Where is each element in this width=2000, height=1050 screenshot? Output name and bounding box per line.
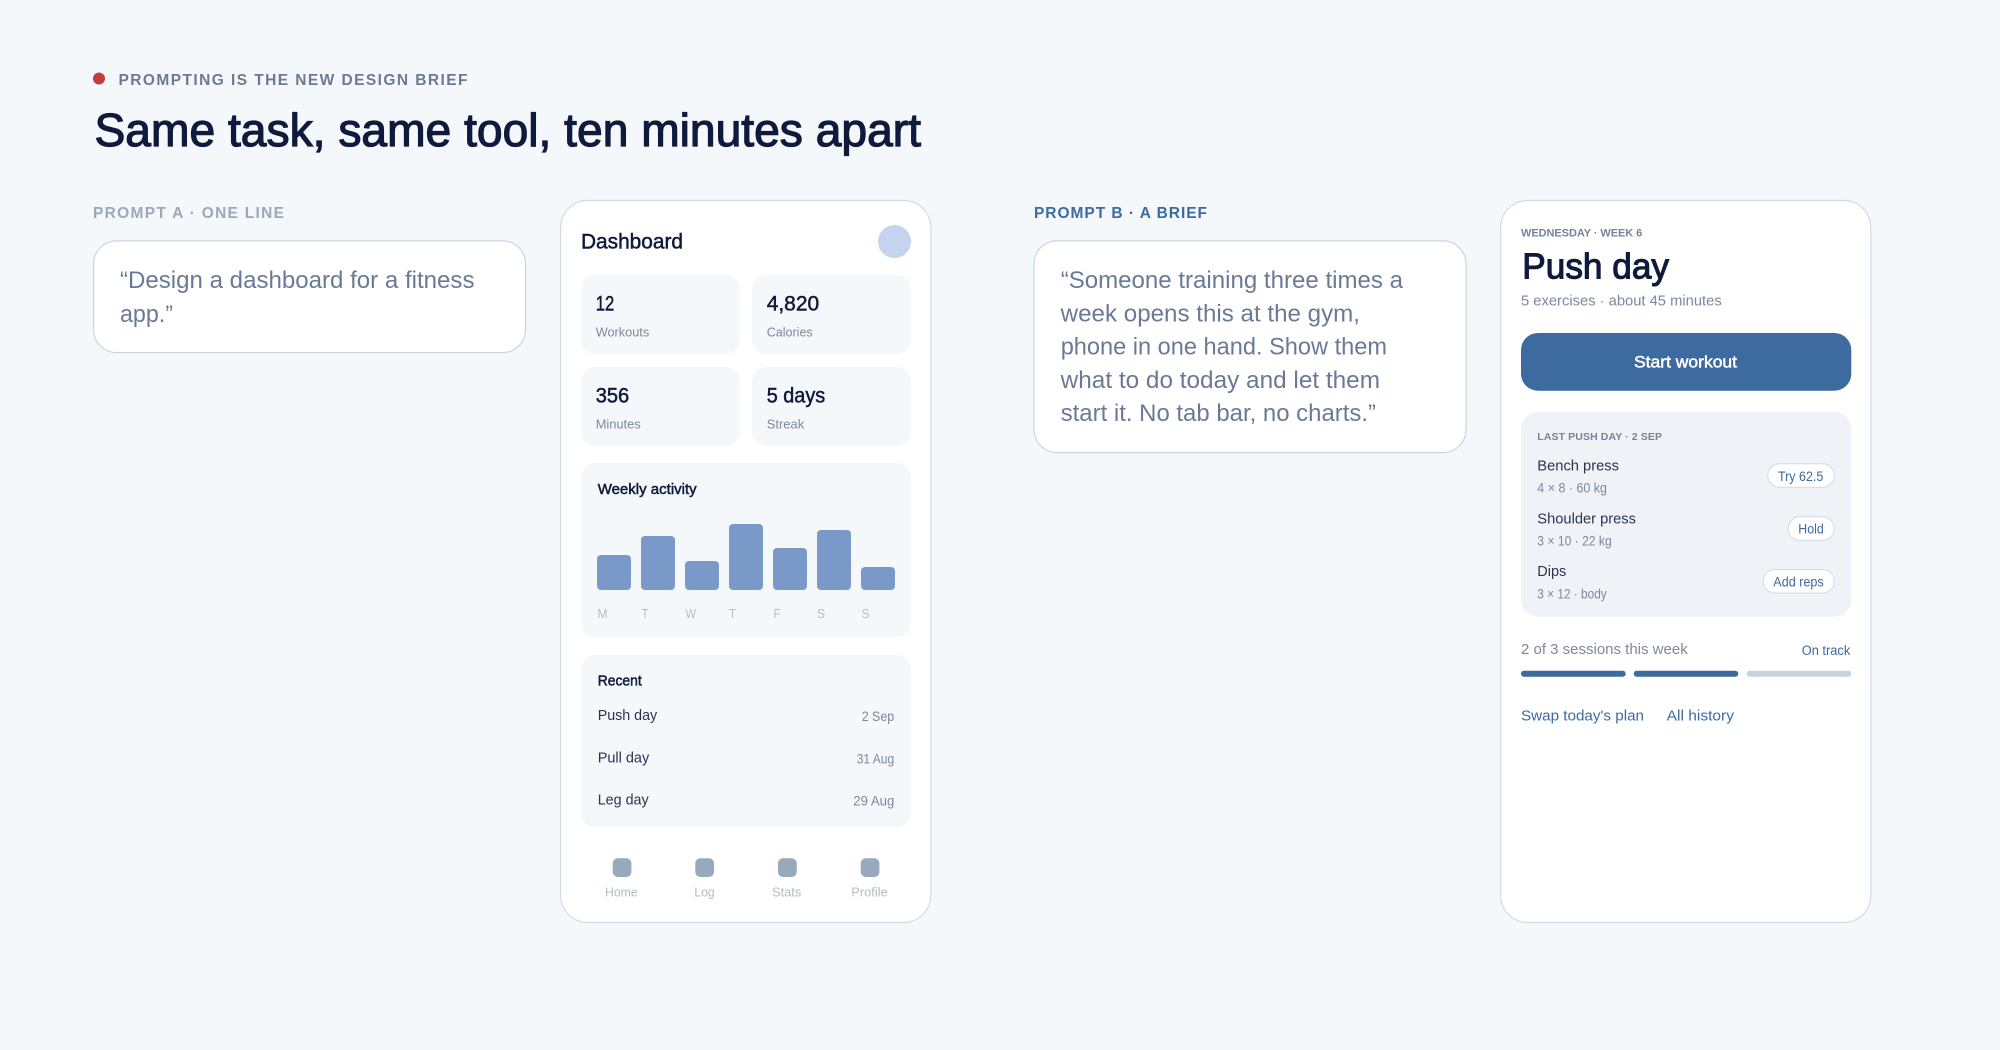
day labels xyxy=(598,606,870,621)
exercise: shoulder press: 3 × 10 · 22 kg xyxy=(1537,534,1612,549)
push day heading: Push day xyxy=(1522,245,1669,286)
tab icons xyxy=(613,858,879,877)
last push day heading: LAST PUSH DAY · 2 SEP xyxy=(1537,431,1662,443)
dashboard heading: Dashboard xyxy=(581,229,683,253)
exercise: dips xyxy=(1537,563,1834,601)
tab labels: Profile xyxy=(851,885,888,900)
recent row: push day: 2 Sep xyxy=(862,709,894,724)
prompt B text: “Someone training three times a xyxy=(1061,267,1404,294)
prompt B text: week opens this at the gym, xyxy=(1060,300,1360,327)
recent row: push day: Push day xyxy=(598,707,658,724)
stat tile: workouts xyxy=(581,275,740,354)
recent row: leg day: Leg day xyxy=(598,792,649,809)
date eyebrow: WEDNESDAY · WEEK 6 xyxy=(1521,228,1642,240)
recent row: pull day xyxy=(598,749,894,766)
start workout button: Start workout xyxy=(1634,353,1737,372)
day labels: M xyxy=(598,606,608,621)
day labels: F xyxy=(774,606,781,621)
prompt A text xyxy=(120,267,475,328)
stat tile: streak: 5 days xyxy=(767,385,825,408)
recent row: leg day xyxy=(598,792,894,809)
exercise: dips: Dips xyxy=(1537,563,1566,580)
recent heading: Recent xyxy=(598,673,642,690)
day labels: S xyxy=(862,606,870,621)
day labels: T xyxy=(729,606,736,621)
on track status: On track xyxy=(1802,643,1851,658)
panel: dashboard phone xyxy=(561,200,931,922)
tab labels: Log xyxy=(694,885,715,900)
panel: last push day xyxy=(1521,412,1851,617)
exercise: bench press: Bench press xyxy=(1537,458,1619,475)
panel: prompt B xyxy=(1034,205,1466,453)
prompt B text: what to do today and let them xyxy=(1060,367,1380,394)
prompt A label: PROMPT A · ONE LINE xyxy=(93,205,284,222)
exercise: dips: 3 × 12 · body xyxy=(1537,586,1607,601)
stat tile: workouts: Workouts xyxy=(596,325,650,340)
panel: recent xyxy=(581,655,911,827)
exercise: bench press: Try 62.5 xyxy=(1778,469,1823,484)
stat tile: workouts: 12 xyxy=(596,293,614,316)
weekly progress xyxy=(1521,641,1851,677)
prompt A text: “Design a dashboard for a fitness xyxy=(120,267,475,294)
link: swap plan: Swap today's plan xyxy=(1521,708,1644,725)
stat tile: minutes xyxy=(581,367,740,446)
tab bar xyxy=(605,858,888,900)
prompt B label: PROMPT B · A BRIEF xyxy=(1034,205,1207,222)
prompt B card xyxy=(1034,241,1466,453)
recent row: leg day: 29 Aug xyxy=(853,794,894,809)
stat tile: minutes: 356 xyxy=(596,385,629,408)
exercise: bench press xyxy=(1537,458,1834,496)
prompt A text: app.” xyxy=(120,301,173,328)
progress segments xyxy=(1521,671,1851,677)
prompt B text: start it. No tab bar, no charts.” xyxy=(1061,400,1376,427)
header xyxy=(93,72,921,156)
phone frame xyxy=(1501,200,1871,922)
stat tile: streak: Streak xyxy=(767,417,805,432)
summary line: 5 exercises · about 45 minutes xyxy=(1521,293,1722,310)
start workout button xyxy=(1521,333,1851,391)
day labels: T xyxy=(642,606,649,621)
stat tile: minutes: Minutes xyxy=(596,417,641,432)
eyebrow: PROMPTING IS THE NEW DESIGN BRIEF xyxy=(118,72,468,89)
link: all history: All history xyxy=(1667,708,1735,725)
recent row: pull day: 31 Aug xyxy=(857,751,894,766)
exercise: shoulder press: Shoulder press xyxy=(1537,510,1636,527)
stat tile: streak xyxy=(752,367,911,446)
tab labels: Stats xyxy=(772,885,802,900)
panel: push day phone xyxy=(1501,200,1871,922)
title: Same task, same tool, ten minutes apart xyxy=(94,104,921,156)
prompt B text: phone in one hand. Show them xyxy=(1061,334,1387,361)
exercise: bench press: 4 × 8 · 60 kg xyxy=(1537,481,1607,496)
recent row: push day xyxy=(598,707,894,724)
exercise: dips: Add reps xyxy=(1773,575,1824,590)
exercise: shoulder press xyxy=(1537,510,1834,549)
icon: red status dot xyxy=(93,72,105,84)
prompt B text xyxy=(1060,267,1404,427)
exercise: shoulder press: Hold xyxy=(1798,522,1824,537)
phone frame xyxy=(561,200,931,922)
panel: weekly activity xyxy=(581,463,911,637)
stat tile: calories: 4,820 xyxy=(767,293,819,316)
tab labels xyxy=(605,885,888,900)
stat tile: calories: Calories xyxy=(767,325,813,340)
stat tile: calories xyxy=(752,275,911,354)
day labels: S xyxy=(817,606,825,621)
panel: prompt A xyxy=(93,205,526,353)
prompt A card xyxy=(94,241,526,353)
sessions label: 2 of 3 sessions this week xyxy=(1521,641,1688,658)
tab labels: Home xyxy=(605,885,638,900)
day labels: W xyxy=(686,606,697,621)
weekly activity heading: Weekly activity xyxy=(598,481,697,498)
avatar xyxy=(878,225,911,258)
recent row: pull day: Pull day xyxy=(598,749,650,766)
bar chart xyxy=(597,524,895,590)
